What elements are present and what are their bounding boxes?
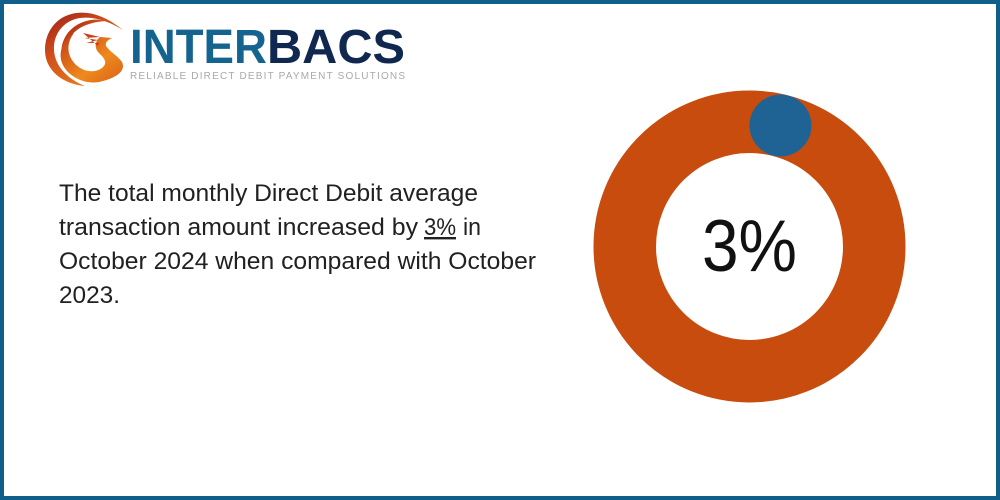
- donut chart: 3%: [625, 94, 874, 371]
- value label: 3%: [702, 206, 797, 287]
- tagline: RELIABLE DIRECT DEBIT PAYMENT SOLUTIONS: [130, 71, 405, 82]
- wordmark: INTERBACS: INTER: [130, 21, 267, 74]
- body text: 2023.: [59, 282, 120, 309]
- body text: transaction amount increased by: [59, 214, 418, 241]
- logo: Interbacs: [45, 13, 405, 86]
- logo: Interbacs: BACS: [267, 21, 405, 74]
- body text: [59, 180, 536, 309]
- ring: [625, 122, 874, 371]
- body text: in: [463, 214, 481, 241]
- body text: October 2024 when compared with October: [59, 248, 536, 275]
- body text: 3%: [424, 214, 456, 241]
- icon: phoenix swirl: [45, 13, 123, 86]
- body text: The total monthly Direct Debit average: [59, 180, 478, 207]
- blue marker: [750, 94, 812, 156]
